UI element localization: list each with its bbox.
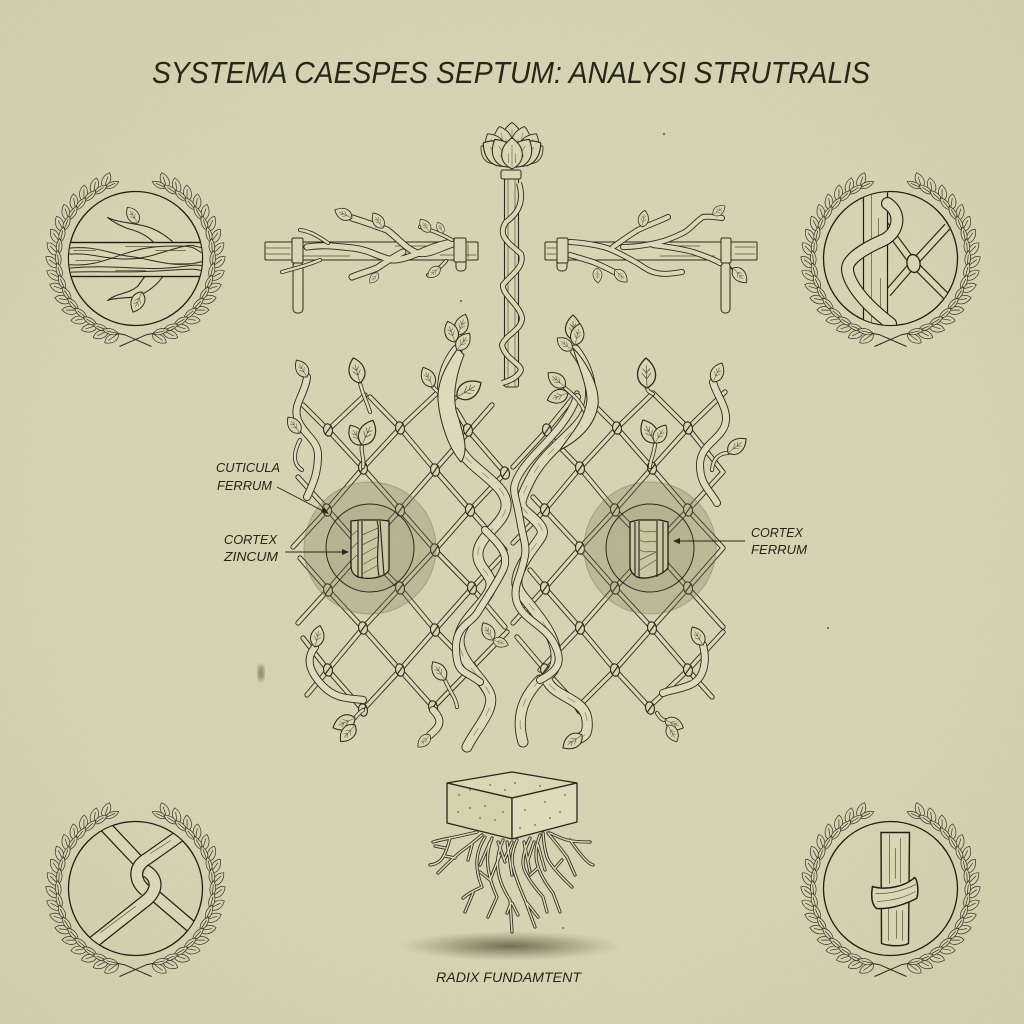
emblem: vine coiling post beside wire	[800, 171, 981, 346]
emblem: wire knot	[45, 801, 226, 976]
right wire cross-section cylinder	[630, 520, 668, 578]
callout labels and leader arrows: left: CUTICULA	[216, 460, 280, 475]
emblem: braided vine on beam	[45, 171, 226, 346]
emblem: band around post	[800, 801, 981, 976]
left horizontal beam with branches	[265, 205, 478, 313]
callout labels and leader arrows: left	[216, 460, 349, 564]
callout label and leader arrow: right: FERRUM	[751, 542, 807, 557]
chain-link fence: wires and twist knots	[293, 392, 725, 717]
caption: RADIX FUNDAMTENT	[436, 970, 583, 985]
callout labels and leader arrows: left: FERRUM	[217, 478, 272, 493]
climbing vines	[295, 348, 728, 747]
title: SYSTEMA CAESPES SEPTUM: ANALYSI STRUTRALIS	[152, 55, 870, 90]
right horizontal beam with branches	[545, 202, 757, 313]
callout label and leader arrow: right: CORTEX	[751, 525, 804, 540]
callout labels and leader arrows: left: ZINCUM	[223, 549, 278, 564]
right detail magnifier circles	[584, 482, 716, 614]
left detail magnifier circles	[304, 482, 436, 614]
icon: artichoke flower bud	[476, 122, 548, 173]
central post with spiral vine	[476, 122, 548, 387]
collar	[501, 170, 521, 179]
callout label and leader arrow: right	[673, 525, 807, 557]
ground shadow	[398, 931, 622, 961]
callout labels and leader arrows: left: CORTEX	[224, 532, 278, 547]
vine leaves	[283, 312, 750, 754]
left wire cross-section cylinder	[351, 520, 389, 578]
foundation block with roots	[430, 772, 593, 932]
